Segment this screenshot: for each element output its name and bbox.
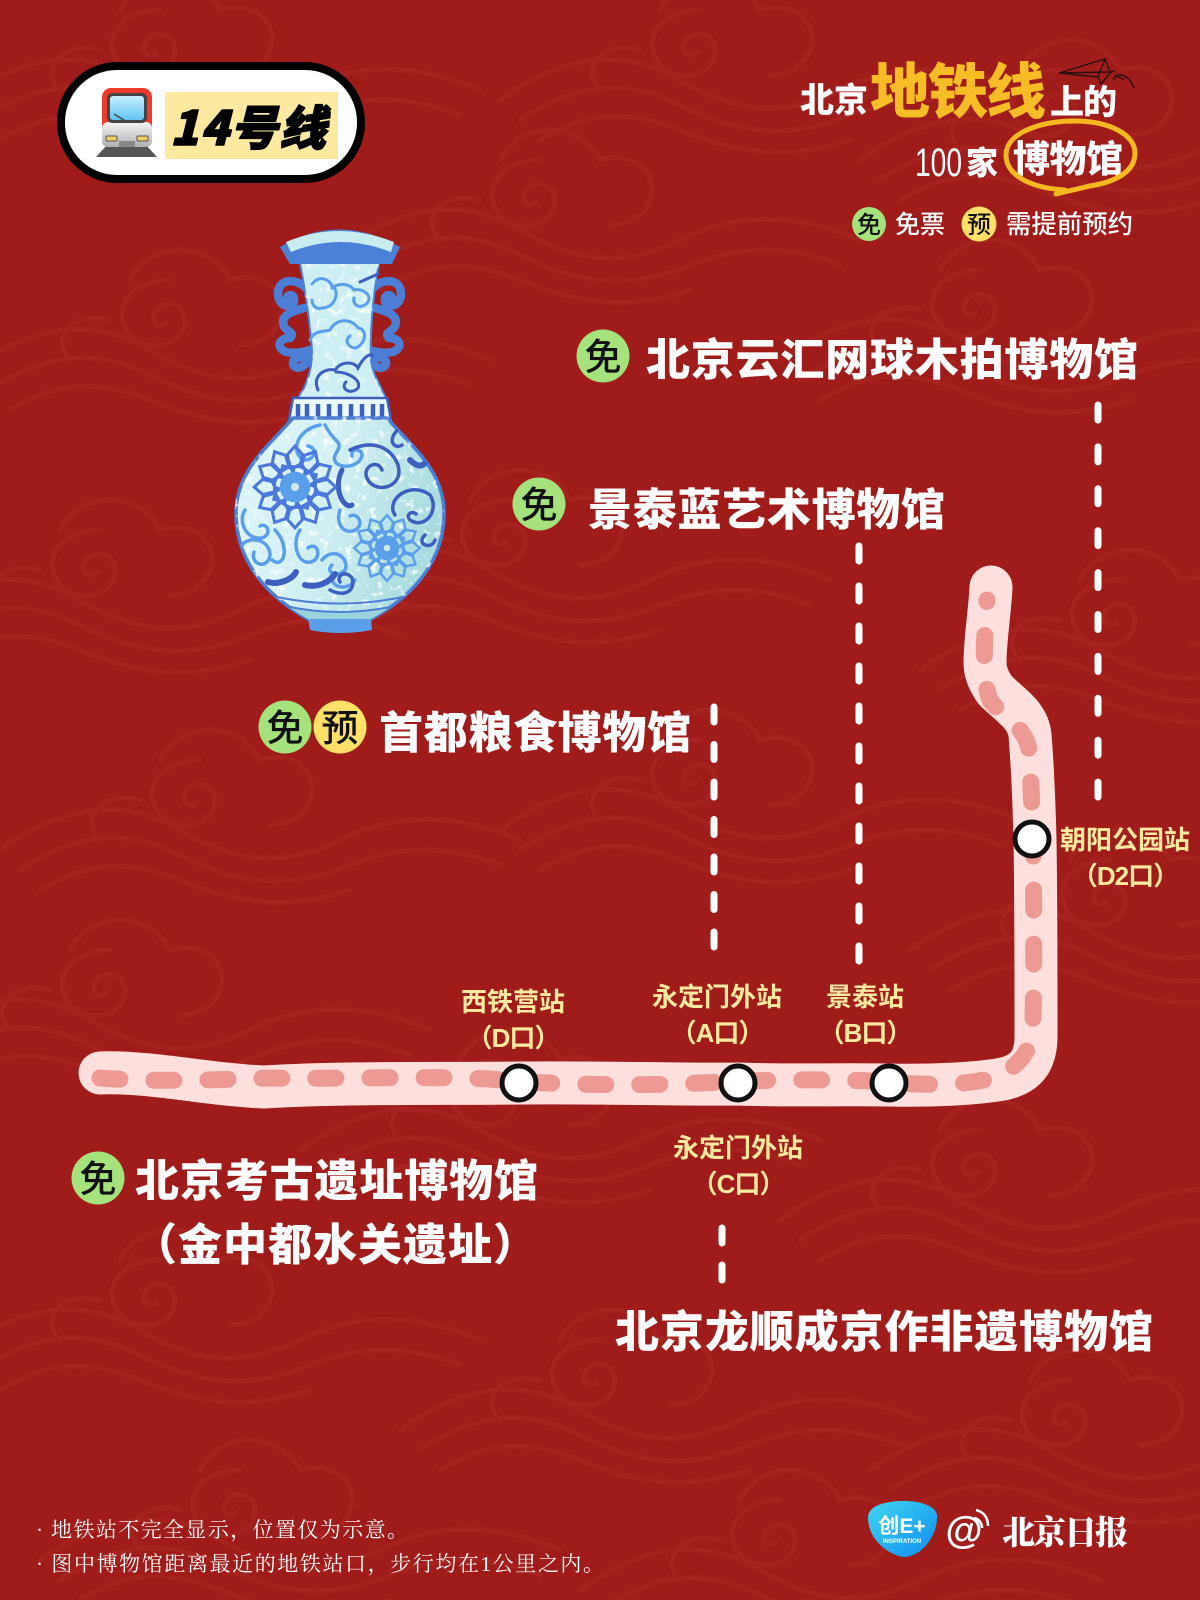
icon: metro train xyxy=(96,88,157,157)
logo: 创E+ inspiration: 创E+ xyxy=(878,1515,926,1538)
icon: free: 免 xyxy=(857,205,881,240)
band xyxy=(289,398,391,420)
legend label: reservation: 需提前预约 xyxy=(1006,211,1133,239)
line name label: 14号线 xyxy=(170,90,331,159)
station label: 景泰站: （B口） xyxy=(819,1018,911,1048)
museum name: 北京云汇网球木拍博物馆 xyxy=(646,324,1138,388)
station label: 景泰站 xyxy=(819,982,911,1048)
line dashes xyxy=(100,600,1034,1085)
station label: 永定门外站 C: （C口） xyxy=(692,1169,784,1199)
museum: 北京云汇网球木拍博物馆 xyxy=(576,324,1138,388)
footnotes xyxy=(36,1518,604,1577)
icon: free: 免 xyxy=(80,1149,116,1203)
icon: free xyxy=(512,475,566,530)
logo: 创E+ inspiration: INSPIRATION xyxy=(883,1539,921,1545)
icon: free: 免 xyxy=(520,475,558,529)
icon: free xyxy=(852,205,886,241)
mouth xyxy=(280,230,400,264)
icon: free: 免 xyxy=(584,327,622,381)
footnotes: · 图中博物馆距离最近的地铁站口，步行均在1公里之内。 xyxy=(36,1552,604,1577)
icon: paper plane xyxy=(1059,59,1134,88)
museum: 北京考古遗址博物馆 xyxy=(72,1145,538,1273)
title: 上的 xyxy=(1050,75,1117,124)
title: 地铁线 xyxy=(870,44,1046,131)
station label: 景泰站: 景泰站 xyxy=(826,982,904,1012)
foot xyxy=(308,619,372,633)
station: 景泰站 xyxy=(872,1066,906,1100)
title: 100 xyxy=(915,141,962,185)
connector: 首都粮食博物馆 xyxy=(710,707,718,947)
logo: 北京日报: 北京日报 xyxy=(1002,1507,1128,1554)
station label: 永定门外站 A xyxy=(652,982,782,1048)
footnotes: · 地铁站不完全显示，位置仅为示意。 xyxy=(36,1518,408,1543)
highlight circle xyxy=(1006,121,1135,194)
station label: 朝阳公园站: 朝阳公园站 xyxy=(1060,825,1190,855)
museum: 首都粮食博物馆 xyxy=(258,697,691,761)
vase illustration xyxy=(230,230,450,633)
icon: free xyxy=(576,327,630,382)
title: 博物馆 xyxy=(1013,129,1123,183)
station label: 永定门外站 C: 永定门外站 xyxy=(673,1133,803,1163)
legend xyxy=(852,205,1133,242)
handles xyxy=(278,281,310,368)
station label: 朝阳公园站 xyxy=(1060,825,1190,891)
logo: weibo at sign: @ xyxy=(945,1510,983,1552)
museum name: 景泰蓝艺术博物馆 xyxy=(588,474,945,538)
station label: 西铁营站: （D口） xyxy=(467,1023,559,1053)
station label: 朝阳公园站: （D2口） xyxy=(1072,861,1178,891)
icon: reservation xyxy=(314,698,366,754)
icon: free xyxy=(258,698,312,754)
title xyxy=(800,44,1135,194)
museum subtitle: （金中都水关遗址） xyxy=(133,1209,537,1273)
neck xyxy=(295,263,387,402)
station label: 西铁营站 xyxy=(461,987,565,1053)
legend label: free: 免票 xyxy=(895,211,945,239)
station: 朝阳公园站 xyxy=(1015,822,1049,856)
museum: 北京龙顺成京作非遗博物馆: 北京龙顺成京作非遗博物馆 xyxy=(615,1296,1153,1360)
museum: 景泰蓝艺术博物馆 xyxy=(512,474,945,538)
museum name: 北京考古遗址博物馆 xyxy=(135,1145,538,1209)
body xyxy=(236,418,444,619)
station label: 西铁营站: 西铁营站 xyxy=(461,987,565,1017)
connector: 景泰蓝艺术博物馆 xyxy=(856,546,862,971)
station label: 永定门外站 C xyxy=(673,1133,803,1199)
icon: reservation: 预 xyxy=(967,205,991,240)
body scroll decoration xyxy=(230,410,450,625)
connector: 北京云汇网球木拍博物馆 xyxy=(1094,405,1102,797)
title: 北京 xyxy=(800,73,868,122)
neck clouds xyxy=(299,264,385,397)
title: 家 xyxy=(966,138,998,184)
icon: reservation xyxy=(962,205,996,242)
connector: 北京龙顺成京作非遗博物馆 xyxy=(718,1228,726,1280)
subway line 14 xyxy=(100,587,1049,1100)
station: 永定门外站 xyxy=(721,1066,755,1100)
icon: free xyxy=(72,1149,124,1204)
station label: 永定门外站 A: （A口） xyxy=(671,1018,763,1048)
museum name: 首都粮食博物馆 xyxy=(379,697,691,761)
logo: 创E+ inspiration xyxy=(868,1501,937,1557)
line halo xyxy=(100,587,1036,1087)
station label: 永定门外站 A: 永定门外站 xyxy=(652,982,782,1012)
icon: reservation: 预 xyxy=(322,698,358,752)
station: 西铁营站 xyxy=(502,1066,536,1100)
icon: free: 免 xyxy=(266,698,304,752)
line badge: 14号线 xyxy=(61,66,361,179)
